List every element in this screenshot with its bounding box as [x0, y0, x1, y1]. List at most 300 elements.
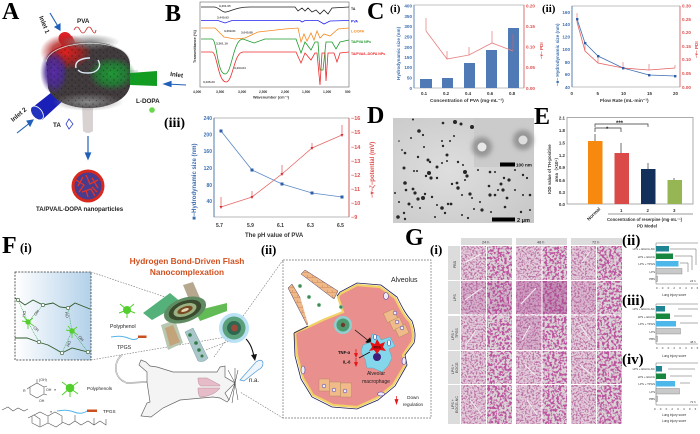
macrophage text	[362, 371, 390, 385]
E axes: 1.5	[559, 140, 566, 146]
iii axes: 80	[206, 183, 212, 189]
label B: B	[165, 1, 181, 27]
chart G iv: 72 h	[690, 400, 696, 404]
C i axes: 0.8	[509, 91, 516, 96]
low magnification tiles	[461, 246, 596, 424]
F heading	[130, 256, 244, 277]
peak labels: 3,401.05	[219, 4, 231, 8]
A labels: TA/PVA/L-DOPA nanoparticles	[36, 206, 124, 213]
B axis: 500	[345, 90, 351, 94]
alveolus wall	[295, 285, 413, 407]
inlet 1 arrow	[50, 13, 60, 30]
chart G iv: LPS + EGCG	[638, 375, 656, 379]
row labels: LPS	[453, 294, 457, 301]
chart G iv: Lung injury score	[662, 419, 687, 423]
C ii axes: 0.10	[682, 57, 691, 62]
A labels: Inlet 2	[10, 106, 29, 124]
iii axes: 6.3	[307, 223, 314, 229]
C i axes: 0.15	[526, 24, 535, 29]
icon: polyphenol	[119, 304, 135, 318]
C ii axes: 0.05	[682, 71, 691, 76]
macrophage	[361, 334, 395, 372]
C ii axes: 0.00	[682, 85, 691, 90]
label G i: (i)	[430, 242, 442, 257]
inlet 2 arrow	[17, 120, 33, 133]
iii axes: −12	[351, 173, 360, 179]
iii axes: 5.9	[247, 223, 254, 229]
A labels: Inlet	[170, 71, 184, 80]
chart G iv: PBS	[649, 397, 655, 401]
right cells	[383, 309, 409, 337]
chart G ii: PBS	[649, 277, 655, 281]
lungs	[198, 378, 220, 397]
TPGS equivalent: ≡	[50, 410, 52, 414]
upper epithelium	[301, 270, 338, 299]
row labels: PBS	[453, 260, 457, 268]
blue inlet opening	[28, 104, 46, 122]
C ii axes: 40	[565, 85, 570, 90]
iii axes: 160	[204, 149, 212, 155]
iii axes: 120	[204, 166, 212, 172]
F heading: Hydrogen Bond-Driven Flash	[130, 256, 244, 266]
iii axes: −11	[351, 187, 360, 193]
scale bar: 2 μm	[517, 218, 530, 224]
B axis: 1,500	[302, 90, 310, 94]
label F i: (i)	[20, 241, 32, 255]
chart G iii: PBS	[649, 337, 655, 341]
right cell nuclei	[393, 311, 404, 330]
bars	[420, 28, 519, 88]
B legend: TA/PVA NPs	[351, 40, 371, 44]
E axes: Concentration of reserpine (mg·mL⁻¹)	[607, 217, 683, 222]
chart G ii: LPS	[650, 270, 655, 274]
C ii axes: 0.20	[682, 30, 691, 35]
TEM image	[393, 118, 534, 224]
high magnification base	[461, 246, 622, 424]
iii axes: −▾−ζ−potential (mV)	[370, 142, 376, 198]
B axis: 2,000	[281, 90, 289, 94]
panel A: mixer device	[17, 13, 186, 202]
OH labels	[21, 309, 85, 347]
disk colour glows	[40, 34, 136, 111]
iii axes: −9	[351, 215, 357, 221]
TA/PVA/L-DOPA NPs curve	[201, 52, 349, 85]
nanoparticle micelle	[219, 313, 249, 343]
disk texture	[46, 42, 130, 108]
B legend: PVA	[351, 20, 358, 24]
column headers: 72 h	[592, 240, 599, 244]
chart G ii: LPS + EGCG	[638, 255, 656, 259]
C i axes: 400	[404, 4, 412, 8]
arrow to macrophage	[355, 330, 372, 344]
TPGS icon	[111, 336, 146, 340]
bond nodes	[16, 298, 90, 355]
label C ii: (ii)	[542, 3, 556, 15]
disk rim	[46, 43, 130, 62]
delivery arrow	[246, 339, 254, 357]
iii axes: 6.5	[337, 223, 344, 229]
macrophage arrow	[359, 352, 370, 358]
C ii axes: 60	[565, 72, 570, 77]
C ii axes: 15	[647, 91, 652, 96]
nanoparticle	[334, 316, 352, 334]
C ii axes: Flow Rate (mL·min⁻¹)	[600, 98, 649, 104]
polyphenols text: Polyphenols	[87, 386, 113, 391]
down regulation legend	[395, 395, 424, 407]
C ii axes: 20	[673, 91, 678, 96]
column headers: 48 h	[537, 240, 544, 244]
polyphenol structure text: R	[23, 389, 26, 393]
B legend: TA/PVA/L-DOPA NPs	[351, 52, 385, 56]
iii axes: 240	[204, 116, 212, 122]
polyphenol structure text: (OH)	[39, 378, 47, 382]
OH labels: HO	[65, 340, 72, 347]
tail	[116, 355, 147, 383]
left epithelium	[288, 284, 311, 325]
B axis: 4,000	[193, 90, 201, 94]
chart G iii: 48 h	[690, 340, 696, 344]
A labels: L-DOPA	[136, 98, 160, 105]
chart iii	[214, 118, 349, 217]
iii axes: −14	[351, 145, 361, 151]
C i axes: 0.1	[421, 91, 428, 96]
E axes: IOD value of TH-positive	[547, 144, 552, 194]
iii axes: The pH value of PVA	[245, 233, 304, 239]
column headers: 24 h	[482, 240, 489, 244]
peak labels: 3,434.64	[234, 66, 246, 70]
zoom guide lines	[91, 260, 283, 418]
down regulation legend: Down	[407, 395, 419, 400]
PVA curve	[201, 20, 349, 24]
whiskers	[228, 368, 238, 403]
size curve	[221, 131, 342, 197]
rotation arrow	[76, 58, 100, 73]
ROS burst	[369, 339, 386, 354]
polyphenol structure	[27, 379, 47, 398]
iii axes: 5.7	[216, 223, 223, 229]
E axes: 0.0	[559, 202, 566, 207]
chart G ii: 24 h	[690, 279, 696, 283]
chart G iii: Lung injury score	[662, 354, 687, 358]
iii axes: −16	[351, 116, 360, 122]
A labels: Inlet 1	[37, 15, 51, 35]
row labels: LPS +	[451, 399, 455, 409]
chart E: ***	[616, 121, 624, 127]
L-DOPA curve	[201, 28, 349, 42]
row labels: TPGS	[455, 328, 459, 338]
E axes: 1.2	[559, 153, 566, 158]
row labels: EGCG	[455, 362, 459, 373]
C ii axes: 0.15	[682, 44, 691, 49]
macrophage text: Alveolar	[367, 371, 385, 377]
lower copper arm	[161, 320, 183, 350]
PDI line	[426, 31, 513, 59]
TEM particles	[394, 118, 531, 220]
macrophage vesicles	[374, 334, 390, 346]
brackets	[595, 124, 648, 132]
label F: F	[2, 233, 17, 259]
chart C ii	[572, 6, 680, 87]
polyphenol structure text: OH	[46, 388, 52, 392]
grid gaps	[461, 246, 622, 424]
cytokine labels: IL-6	[343, 360, 351, 364]
C ii axes: 140	[562, 22, 570, 27]
polymer chains	[15, 298, 91, 353]
C i axes: 0.20	[526, 4, 535, 8]
C ii axes: −▾− PDI	[694, 41, 699, 58]
C i axes: 200	[404, 45, 412, 50]
chart G ii: LPS + TPGS	[638, 262, 655, 266]
down regulation legend: regulation	[403, 402, 424, 407]
left green arm	[143, 293, 182, 320]
C ii axes: 10	[621, 91, 626, 96]
TPGS text: TPGS	[117, 345, 132, 351]
B axis: 1,000	[323, 90, 331, 94]
nozzle	[240, 360, 263, 381]
B legend	[351, 7, 385, 56]
C i axes: 0.00	[526, 86, 535, 91]
B axis: 3,000	[238, 90, 246, 94]
chart E	[567, 118, 693, 204]
OH labels: OH	[33, 309, 40, 317]
C ii axes: 0.25	[682, 17, 691, 22]
TA diamond	[66, 119, 73, 129]
hydrogen bonds	[18, 300, 88, 353]
iii axes: −10	[351, 201, 360, 207]
C ii axes	[555, 4, 699, 104]
bars	[588, 141, 602, 204]
label C i: (i)	[390, 3, 401, 15]
row labels	[448, 246, 460, 424]
C ii axes: 120	[562, 34, 570, 40]
label G ii: (ii)	[622, 233, 640, 249]
C ii axes: 160	[562, 10, 570, 15]
row labels: LPS +	[451, 330, 455, 340]
blue inlet	[33, 88, 66, 120]
OH labels: HO	[64, 311, 70, 318]
peak labels: 3,436.23	[203, 80, 215, 84]
potential curve	[221, 135, 342, 207]
size curve	[577, 19, 675, 76]
B axis: Wavenumber (cm⁻¹)	[253, 96, 290, 100]
B axis: 3,500	[216, 90, 224, 94]
C ii axes: −■− Hydrodynamic size (nm)	[555, 23, 560, 86]
C i axes: 0.10	[526, 44, 535, 50]
chart G ii: Lung injury score	[662, 293, 687, 297]
PVA wave	[74, 27, 96, 33]
body outline	[139, 360, 235, 417]
E axes: 0.3	[559, 190, 566, 195]
peak labels: 3,440.93	[217, 16, 229, 20]
label E: E	[534, 104, 550, 130]
right green arm	[195, 303, 227, 321]
L-DOPA dot	[149, 107, 155, 113]
white airway	[296, 277, 341, 324]
peak labels: 3,045.88	[241, 30, 253, 34]
n.a. text: n.a.	[249, 378, 259, 384]
label G iii: (iii)	[622, 293, 644, 309]
iii axes: −15	[351, 130, 360, 136]
green inlet	[128, 70, 157, 86]
C ii axes: 80	[565, 60, 570, 65]
macrophage text: macrophage	[362, 379, 390, 385]
E axes: PD Model	[637, 224, 657, 228]
polyphenol text: Polyphenol	[110, 324, 136, 330]
wall cells	[301, 292, 406, 396]
label D: D	[367, 103, 384, 129]
iii axes: 40	[206, 199, 212, 205]
chart C i	[414, 5, 524, 88]
chart G ii: LPS + EGCG-NC	[633, 247, 655, 251]
polyphenol structure text: OH	[39, 399, 45, 403]
C i axes: 300	[404, 24, 412, 29]
C ii axes: 100	[562, 47, 570, 52]
nanoparticle	[72, 170, 104, 202]
scale bar	[492, 218, 530, 224]
C i axes: 350	[404, 14, 412, 19]
chart G ii	[633, 243, 700, 297]
iii axes: 6.1	[277, 223, 284, 229]
polyphenol structure text	[23, 378, 56, 403]
E axes	[547, 116, 693, 228]
chart G iii: LPS	[650, 330, 655, 334]
A labels: PVA	[77, 18, 90, 25]
significance: *	[606, 127, 609, 133]
chart G iii	[633, 304, 700, 358]
outer wall line	[294, 283, 415, 409]
C i axes: 0.2	[443, 91, 450, 96]
F heading: Nanocomplexation	[150, 267, 224, 277]
inlet right arrow	[164, 82, 186, 86]
peak labels: 3,209.61	[224, 29, 236, 33]
TPGS structure	[2, 407, 106, 427]
label G: G	[405, 225, 424, 251]
E axes: area（×10⁵）	[554, 155, 560, 182]
mouse	[116, 355, 238, 417]
tail core	[116, 355, 147, 383]
histology grid	[448, 238, 622, 424]
B axis: Transmittance (%)	[193, 30, 197, 63]
E axes: 1	[620, 208, 623, 213]
C i axes: 0.05	[526, 65, 535, 70]
E axes: 0.6	[559, 178, 566, 183]
TEM inset: 100 nm	[516, 162, 532, 168]
label iii: (iii)	[164, 116, 185, 131]
top arm	[183, 282, 200, 302]
TEM inset	[472, 118, 534, 168]
C ii axes: 0.30	[682, 4, 691, 8]
C i axes: 250	[404, 34, 412, 40]
cytokine labels: TNF-α	[338, 350, 351, 355]
TPGS legend text: TPGS	[103, 409, 116, 414]
iii axes: −13	[351, 159, 360, 165]
chart G iv: LPS	[650, 390, 655, 394]
alveolus text: Alveolus	[391, 277, 418, 284]
TPGS equivalent	[50, 410, 97, 414]
C i axes	[396, 4, 544, 104]
peak labels: 3,361.19	[216, 42, 228, 46]
B axis	[193, 30, 351, 100]
disk	[160, 291, 210, 329]
iii axes: 200	[204, 132, 212, 138]
E axes: 0.9	[559, 165, 566, 170]
iii axes: ■−Hydrodynamic size (nm)	[192, 144, 198, 220]
box: hydrogen bond network	[15, 272, 91, 360]
polyphenol node 2	[66, 326, 78, 338]
A labels	[10, 15, 184, 213]
bottom cells	[319, 379, 352, 397]
red inlet	[58, 32, 78, 50]
PDI curve	[577, 22, 675, 70]
C i axes: Hydrodynamic size (nm)	[396, 26, 401, 80]
chart G iii: LPS + EGCG-NC	[633, 307, 655, 311]
chart G iv: LPS + TPGS	[638, 382, 655, 386]
E axes: 3	[673, 208, 676, 213]
nucleus	[373, 353, 381, 361]
C ii axes: 5	[596, 91, 600, 96]
OH labels: OH	[32, 325, 40, 333]
row labels: EGCG-NC	[455, 396, 459, 413]
disk body	[46, 42, 130, 108]
label G iv: (iv)	[622, 352, 644, 368]
chart G iv	[633, 363, 700, 423]
polyphenol structure text: ≡	[54, 388, 56, 392]
error bars	[595, 134, 674, 180]
label F ii: (ii)	[261, 243, 276, 257]
C i axes: 100	[404, 65, 412, 70]
FTIR chart	[200, 2, 349, 87]
iii axes	[192, 116, 376, 239]
B legend: TA	[351, 7, 356, 11]
row labels: LPS +	[451, 364, 455, 374]
peak labels	[203, 4, 253, 84]
E axes: Normal	[586, 206, 602, 222]
C i axes: 50	[407, 76, 412, 80]
outlet tube	[82, 104, 93, 133]
C i axes: 0.6	[487, 91, 494, 96]
C i axes: 0.4	[465, 91, 472, 96]
flash mixer chip	[143, 282, 227, 362]
cytokine arrows	[354, 349, 358, 366]
C i axes: −▾− PDI	[539, 42, 544, 59]
arrow head	[251, 354, 257, 361]
viruses	[298, 284, 343, 309]
bottom cell nuclei	[322, 384, 347, 393]
E axes: 1.8	[559, 128, 566, 133]
chart G iii: LPS + EGCG	[638, 315, 656, 319]
column headers	[461, 238, 622, 245]
B axis: 2,500	[259, 90, 267, 94]
polyphenol node 1	[22, 317, 34, 329]
TA/PVA NPs curve	[201, 39, 349, 74]
C i axes: 150	[404, 55, 412, 60]
test tube	[185, 328, 208, 362]
tube dots	[188, 333, 204, 358]
A labels: TA	[53, 122, 61, 129]
box: alveolus	[283, 260, 431, 418]
down arrow	[86, 136, 90, 159]
high magnification cells	[461, 246, 622, 424]
B legend: L-DOPA	[351, 30, 365, 34]
OH labels: HO	[21, 310, 27, 317]
chart G iv: Lung injury score	[662, 413, 687, 417]
chart G iv: LPS + EGCG-NC	[633, 367, 655, 371]
ROS label: ROS	[374, 346, 381, 350]
polyphenols icon	[62, 382, 78, 397]
tissue streaks	[465, 252, 592, 415]
TA curve	[201, 7, 349, 14]
C i axes: 0	[409, 86, 412, 91]
